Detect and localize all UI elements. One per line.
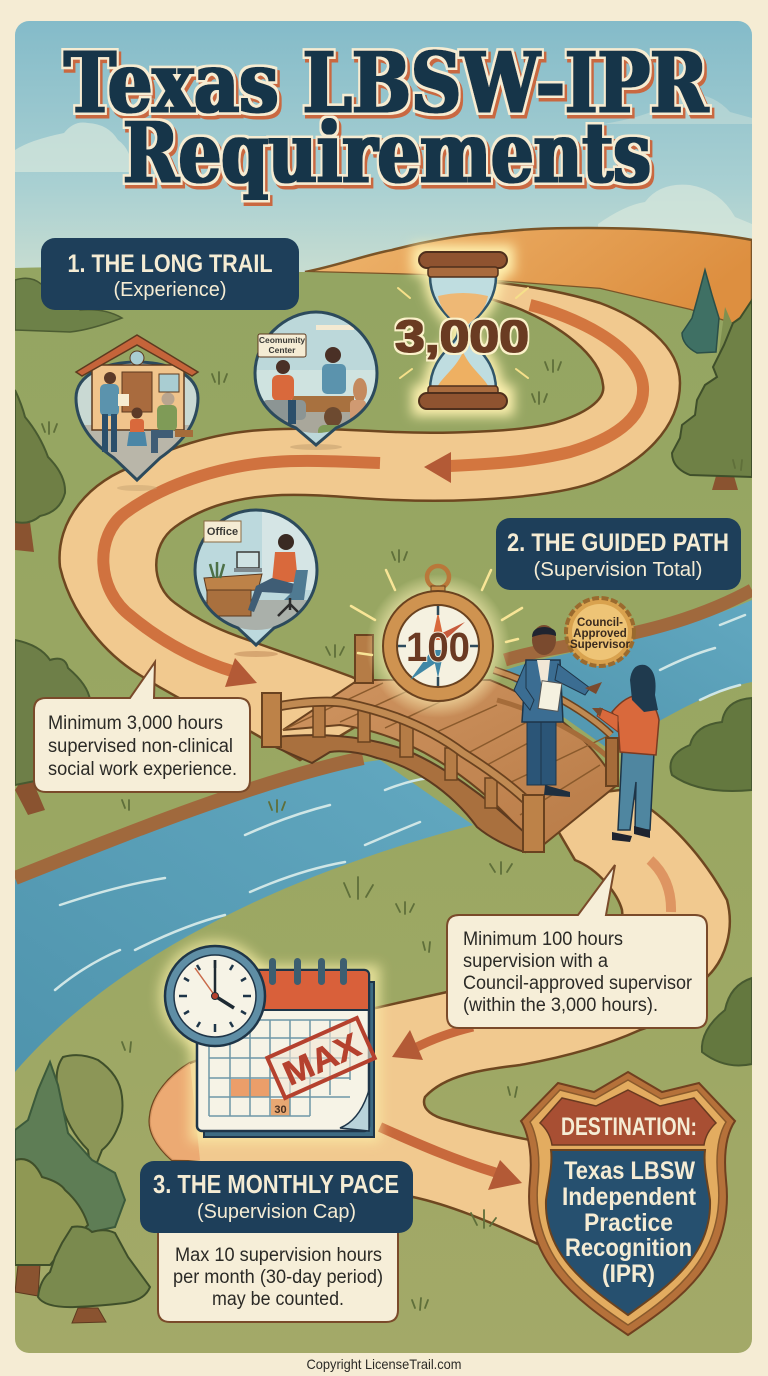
callout: 100 hours: (within the 3,000 hours). bbox=[463, 995, 658, 1016]
callout: 100 hours: Council-approved supervisor bbox=[463, 973, 693, 994]
section label 2: the guided path bbox=[496, 518, 741, 590]
sign: office: Office bbox=[207, 526, 238, 538]
callout: 100 hours bbox=[447, 865, 707, 1028]
callout: 3,000 hours: supervised non-clinical bbox=[48, 736, 233, 757]
callout: 3,000 hours: Minimum 3,000 hours bbox=[48, 713, 223, 734]
badge: council-approved supervisor: Supervisor bbox=[570, 639, 631, 651]
near rail bbox=[313, 706, 497, 808]
section label 3: the monthly pace bbox=[140, 1161, 413, 1233]
copyright footer: Copyright LicenseTrail.com bbox=[306, 1356, 462, 1372]
callout: monthly cap: per month (30-day period) bbox=[173, 1267, 383, 1288]
callout: monthly cap: may be counted. bbox=[212, 1289, 344, 1310]
river lower bbox=[15, 758, 473, 1072]
grass ground bbox=[15, 267, 752, 1353]
sign: community center: Center bbox=[269, 345, 296, 355]
badge: council-approved supervisor: Council- bbox=[577, 617, 623, 629]
shield text: destination: DESTINATION: bbox=[561, 1113, 697, 1141]
right bushes bbox=[670, 698, 752, 1066]
shield text: credential name bbox=[562, 1157, 697, 1288]
callout: 100 hours: Minimum 100 hours bbox=[463, 929, 623, 950]
grass tufts bbox=[42, 360, 742, 1310]
shield text: credential name: Recognition bbox=[565, 1234, 692, 1262]
badge: council-approved supervisor bbox=[566, 598, 634, 666]
shield text: credential name: Independent bbox=[562, 1183, 697, 1211]
top-left bush bbox=[15, 278, 122, 332]
shield text: credential name: Practice bbox=[584, 1209, 673, 1237]
callout: 3,000 hours bbox=[34, 662, 250, 792]
pin 2: community center bbox=[255, 312, 377, 450]
callout: monthly cap bbox=[158, 1225, 398, 1322]
supervisee bbox=[592, 665, 659, 842]
number: 100: 100 bbox=[406, 624, 470, 670]
stamp: MAX bbox=[267, 1018, 375, 1098]
stopwatch compass with 100 bbox=[351, 566, 522, 718]
trail: lower winding path bbox=[150, 790, 730, 1245]
trail arrow: toward calendar bbox=[392, 1027, 473, 1060]
right pine trees bbox=[672, 270, 752, 490]
caseworker and family bbox=[104, 372, 116, 384]
left tree lower bbox=[15, 640, 90, 815]
trail arrow: toward 3,000 turn bbox=[424, 305, 643, 483]
house bbox=[92, 365, 184, 430]
title: Requirements bbox=[123, 104, 651, 202]
calendar: 30 bbox=[274, 1104, 287, 1116]
shield text: credential name: (IPR) bbox=[602, 1260, 655, 1288]
section label 1: the long trail bbox=[41, 238, 299, 310]
bottom-left trees bbox=[15, 1055, 150, 1323]
shield text: credential name: Texas LBSW bbox=[564, 1157, 695, 1185]
bridge bbox=[262, 635, 618, 852]
callout: monthly cap: Max 10 supervision hours bbox=[175, 1245, 382, 1266]
sky bbox=[15, 21, 752, 272]
orange hill bbox=[305, 228, 752, 330]
number: 3,000: 3,000 bbox=[395, 311, 529, 362]
pin 1: family home visit bbox=[76, 335, 198, 491]
section label 1: the long trail: (Experience) bbox=[114, 279, 226, 301]
river upper right bbox=[500, 590, 752, 750]
people: supervisor and supervisee bbox=[514, 625, 659, 842]
callout: 3,000 hours: social work experience. bbox=[48, 759, 237, 780]
clock and calendar bbox=[159, 940, 380, 1142]
section label 1: the long trail: 1. THE LONG TRAIL bbox=[68, 250, 272, 278]
bridge arch body bbox=[275, 735, 525, 852]
bridge deck bbox=[283, 680, 617, 850]
trail arrow: toward destination bbox=[380, 1127, 522, 1190]
stamp: MAX: MAX bbox=[278, 1026, 366, 1093]
sign: office bbox=[204, 521, 241, 542]
section label 2: the guided path: 2. THE GUIDED PATH bbox=[507, 529, 729, 557]
supervisor bbox=[514, 625, 602, 797]
section label 3: the monthly pace: (Supervision Cap) bbox=[197, 1201, 356, 1223]
sign: community center: Ceomumity bbox=[259, 335, 305, 345]
section label 3: the monthly pace: 3. THE MONTHLY PACE bbox=[153, 1169, 399, 1199]
section label 2: the guided path: (Supervision Total) bbox=[534, 559, 702, 581]
left tree upper bbox=[15, 390, 65, 552]
badge: council-approved supervisor: Approved bbox=[573, 628, 627, 640]
clouds bbox=[15, 93, 752, 240]
sign: community center bbox=[258, 334, 306, 357]
destination shield bbox=[521, 1072, 735, 1335]
calendar bbox=[197, 958, 374, 1137]
title bbox=[64, 34, 709, 202]
far rail bbox=[494, 670, 611, 735]
trail: upper winding path bbox=[60, 280, 680, 760]
hourglass with 3,000 bbox=[395, 252, 529, 409]
trail arrow: toward bridge bbox=[103, 461, 380, 687]
callout: 100 hours: supervision with a bbox=[463, 951, 608, 972]
pin 3: office bbox=[195, 510, 318, 657]
clock bbox=[165, 946, 265, 1046]
